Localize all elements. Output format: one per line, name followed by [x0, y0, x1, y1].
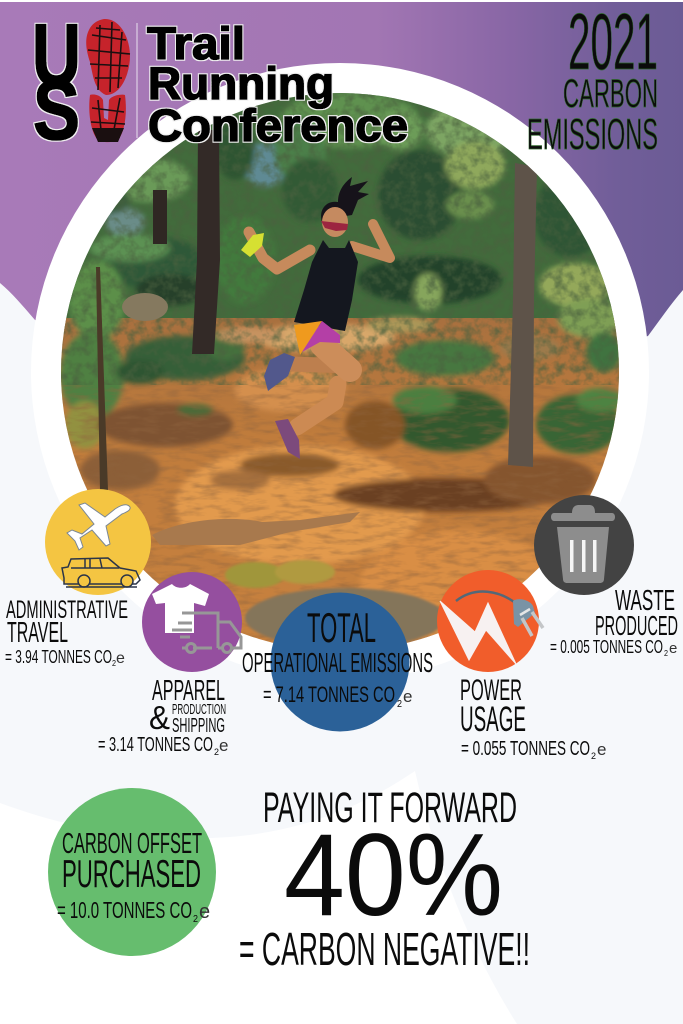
icon: power usage [437, 570, 543, 672]
apparel label [98, 675, 228, 757]
foliage patches [60, 92, 624, 640]
left tree trunk [192, 130, 220, 354]
shorts [294, 321, 322, 355]
thigh, raised leg [322, 345, 350, 370]
black tank top [294, 240, 358, 331]
apparel label: SHIPPING [172, 715, 225, 737]
ground root [152, 512, 360, 545]
yellow bottle [241, 233, 264, 257]
sunglasses [321, 221, 348, 231]
raised right arm [249, 232, 310, 269]
administrative travel label: = 3.94 TONNES CO [5, 647, 112, 667]
logo: U S letters: U [32, 5, 81, 104]
total emissions circle: OPERATIONAL EMISSIONS [242, 647, 433, 678]
logo: wordmark: Running [148, 58, 334, 109]
trail ground [55, 318, 625, 663]
carbon offset circle: = 10.0 TONNES CO [57, 897, 192, 923]
carbon offset circle: 2 [193, 914, 198, 925]
total emissions circle: 2 [397, 699, 402, 710]
total emissions circle: TOTAL [307, 604, 376, 651]
photo: runner jumping on a forest trail [55, 85, 625, 663]
lower shoe [275, 419, 300, 459]
pale background shape: left circle [0, 250, 683, 1024]
icon: lightning bolt [440, 601, 516, 664]
hair [321, 177, 369, 222]
right tree trunk [508, 163, 537, 467]
logo: wordmark: Conference [148, 100, 408, 151]
icon: administrative travel [45, 489, 151, 595]
shorts panel [302, 321, 340, 352]
ground texture [55, 385, 625, 660]
carbon offset circle: PURCHASED [62, 853, 201, 896]
apparel label: 2 [214, 747, 219, 757]
icon: car [62, 558, 140, 587]
paying it forward block: 40% [284, 809, 503, 940]
waste label [550, 585, 678, 658]
shin, raised leg [292, 364, 350, 366]
icon: waste bin [534, 495, 634, 595]
paying it forward block [239, 784, 530, 975]
logo: shoe print [86, 19, 130, 142]
total emissions circle [242, 592, 433, 732]
small pine trunk [96, 267, 108, 490]
administrative travel label: TRAVEL [7, 617, 68, 649]
icon: t-shirt [152, 584, 209, 633]
forest backdrop [55, 85, 625, 330]
power usage label: = 0.055 TONNES CO [461, 738, 590, 760]
head [322, 207, 348, 237]
logo: wordmark: Trail [147, 18, 245, 69]
icon: truck [172, 613, 241, 652]
administrative travel label: e [116, 650, 125, 667]
logo divider [136, 23, 138, 138]
upper shoe [264, 353, 295, 391]
logo: U S letters: S [33, 63, 80, 157]
purple header shape [0, 2, 683, 430]
rock left [122, 293, 168, 321]
carbon offset circle: CARBON OFFSET [62, 828, 202, 860]
icon: apparel [142, 572, 242, 672]
logo: wordmark [147, 18, 408, 151]
logo: U S letters [32, 5, 81, 157]
power usage label: 2 [591, 751, 596, 761]
carbon offset circle [48, 788, 216, 956]
forest texture [55, 85, 625, 385]
yellow grass [225, 560, 335, 588]
apparel label: & [149, 699, 170, 736]
waste label: e [669, 640, 677, 657]
icon: plane [67, 503, 130, 550]
power usage label: e [597, 740, 606, 759]
administrative travel label [5, 597, 128, 668]
power usage label [460, 674, 606, 761]
white ring around photo [31, 63, 649, 681]
carbon offset circle: e [199, 901, 210, 923]
apparel label: PRODUCTION [172, 702, 226, 718]
icon: plug cord [456, 592, 518, 605]
back tree trunk [153, 190, 167, 244]
logo [32, 5, 408, 157]
waste label: 2 [664, 649, 668, 658]
apparel label: = 3.14 TONNES CO [98, 734, 213, 756]
power usage label: POWER [460, 674, 522, 707]
power usage label: USAGE [460, 700, 526, 739]
apparel label: e [219, 736, 228, 755]
lower leg [297, 384, 338, 427]
icon: plug [513, 599, 543, 636]
apparel label: APPAREL [152, 675, 225, 707]
raised left arm [352, 224, 390, 258]
boulder on ground [245, 588, 445, 648]
total emissions circle: e [403, 687, 412, 706]
administrative travel label: ADMINISTRATIVE [6, 597, 128, 624]
runner [241, 177, 390, 459]
administrative travel label: 2 [112, 659, 116, 668]
total emissions circle: = 7.14 TONNES CO [263, 682, 395, 707]
heading: 2021 carbon emissions [527, 0, 658, 159]
